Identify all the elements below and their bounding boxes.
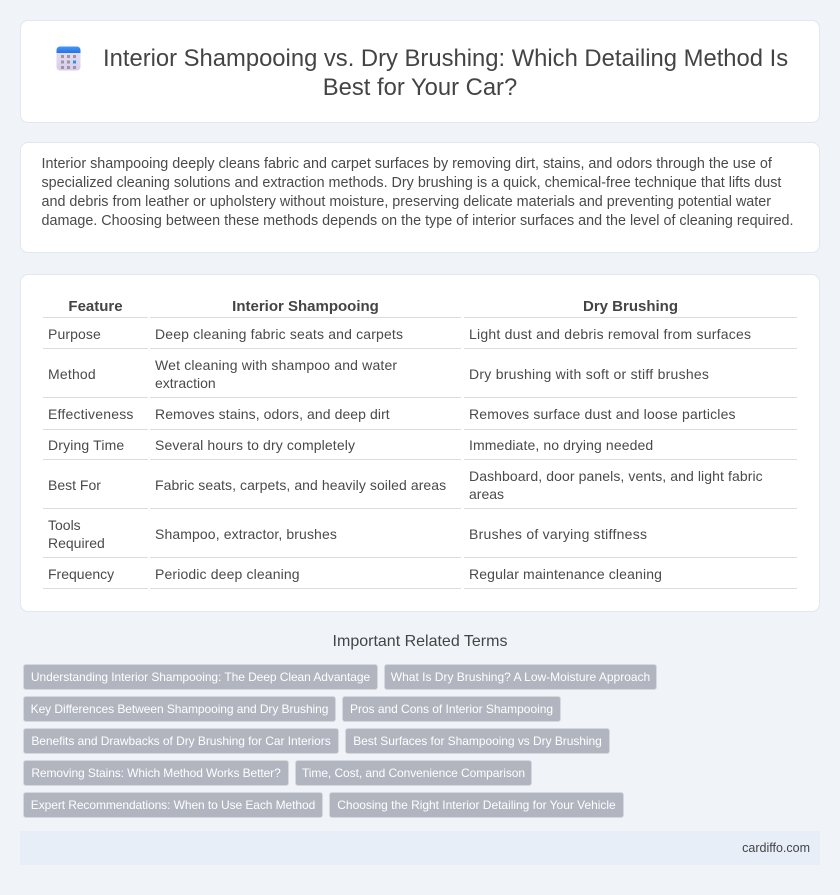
tag bbox=[23, 792, 323, 818]
tag bbox=[329, 792, 624, 818]
intro paragraph: damage. Choosing between these methods depends on the type of interior surfaces and the level of cleaning required. bbox=[42, 213, 793, 229]
row: frequency: Regular maintenance cleaning bbox=[469, 566, 662, 582]
row: effectiveness bbox=[48, 406, 736, 422]
tag: Best Surfaces for Shampooing vs Dry Brushing bbox=[353, 734, 602, 748]
tag bbox=[345, 728, 610, 754]
row: drying time: Drying Time bbox=[48, 437, 124, 453]
tag bbox=[295, 760, 532, 786]
row: method: Wet cleaning with shampoo and water bbox=[155, 357, 397, 373]
row: drying time: Immediate, no drying needed bbox=[469, 437, 653, 453]
row: best for: areas bbox=[469, 486, 504, 502]
row: tools required: Brushes of varying stiffness bbox=[469, 526, 647, 542]
row: drying time bbox=[48, 437, 653, 453]
tag bbox=[23, 728, 339, 754]
table header: Feature bbox=[68, 298, 123, 315]
row: frequency bbox=[48, 566, 662, 582]
row: tools required: Required bbox=[48, 535, 105, 551]
row: tools required: Tools bbox=[48, 517, 81, 533]
row: method: Method bbox=[48, 366, 96, 382]
row: best for: Fabric seats, carpets, and heavily soiled areas bbox=[155, 477, 446, 493]
title: Interior Shampooing vs. Dry Brushing: Which Detailing Method Is bbox=[103, 45, 788, 72]
tag: Understanding Interior Shampooing: The Deep Clean Advantage bbox=[31, 670, 370, 684]
intro paragraph: and debris from leather or upholstery without moisture, preserving delicate materials and preventing potential water bbox=[42, 194, 771, 210]
row: method bbox=[48, 357, 709, 391]
table header: Interior Shampooing bbox=[232, 298, 379, 315]
row: drying time: Several hours to dry completely bbox=[155, 437, 355, 453]
row: best for bbox=[48, 468, 763, 502]
intro paragraph: specialized cleaning solutions and extraction methods. Dry brushing is a quick, chemical-free technique that lifts dust bbox=[42, 175, 781, 191]
row: best for: Best For bbox=[48, 477, 101, 493]
table header bbox=[68, 298, 678, 315]
related terms heading: Important Related Terms bbox=[333, 633, 507, 650]
panel: comparison table bbox=[20, 274, 820, 612]
tag: What Is Dry Brushing? A Low-Moisture Approach bbox=[391, 670, 650, 684]
tag bbox=[23, 760, 289, 786]
tag: Expert Recommendations: When to Use Each Method bbox=[31, 798, 315, 812]
tag: Time, Cost, and Convenience Comparison bbox=[302, 766, 525, 780]
row: purpose: Purpose bbox=[48, 326, 101, 342]
related terms tags bbox=[23, 664, 657, 818]
row: frequency: Periodic deep cleaning bbox=[155, 566, 300, 582]
tag bbox=[23, 696, 336, 722]
row: purpose: Light dust and debris removal from surfaces bbox=[469, 326, 751, 342]
title bbox=[103, 45, 788, 101]
title: Best for Your Car? bbox=[323, 74, 517, 101]
row: tools required: Shampoo, extractor, brushes bbox=[155, 526, 337, 542]
row: effectiveness: Removes stains, odors, and deep dirt bbox=[155, 406, 390, 422]
row: method: Dry brushing with soft or stiff brushes bbox=[469, 366, 709, 382]
tag: Choosing the Right Interior Detailing for Your Vehicle bbox=[337, 798, 616, 812]
panel: intro text bbox=[20, 142, 820, 253]
tag: Benefits and Drawbacks of Dry Brushing for Car Interiors bbox=[31, 734, 331, 748]
tag bbox=[384, 664, 657, 690]
intro paragraph bbox=[42, 156, 793, 229]
row: tools required bbox=[48, 517, 647, 551]
table header: Dry Brushing bbox=[583, 298, 678, 315]
icon: calendar bbox=[56, 46, 80, 70]
row: purpose: Deep cleaning fabric seats and carpets bbox=[155, 326, 403, 342]
row: method: extraction bbox=[155, 375, 216, 391]
row: frequency: Frequency bbox=[48, 566, 114, 582]
tag bbox=[342, 696, 561, 722]
tag: Removing Stains: Which Method Works Better? bbox=[31, 766, 281, 780]
source label: cardiffo.com bbox=[742, 841, 810, 855]
panel: header bbox=[20, 20, 820, 123]
row: best for: Dashboard, door panels, vents, and light fabric bbox=[469, 468, 763, 484]
footer bbox=[20, 831, 820, 865]
intro paragraph: Interior shampooing deeply cleans fabric and carpet surfaces by removing dirt, stains, and odors through the use of bbox=[42, 156, 772, 172]
tag bbox=[23, 664, 378, 690]
row: purpose bbox=[48, 326, 751, 342]
row: effectiveness: Effectiveness bbox=[48, 406, 134, 422]
row: effectiveness: Removes surface dust and loose particles bbox=[469, 406, 736, 422]
tag: Pros and Cons of Interior Shampooing bbox=[350, 702, 553, 716]
tag: Key Differences Between Shampooing and Dry Brushing bbox=[31, 702, 328, 716]
